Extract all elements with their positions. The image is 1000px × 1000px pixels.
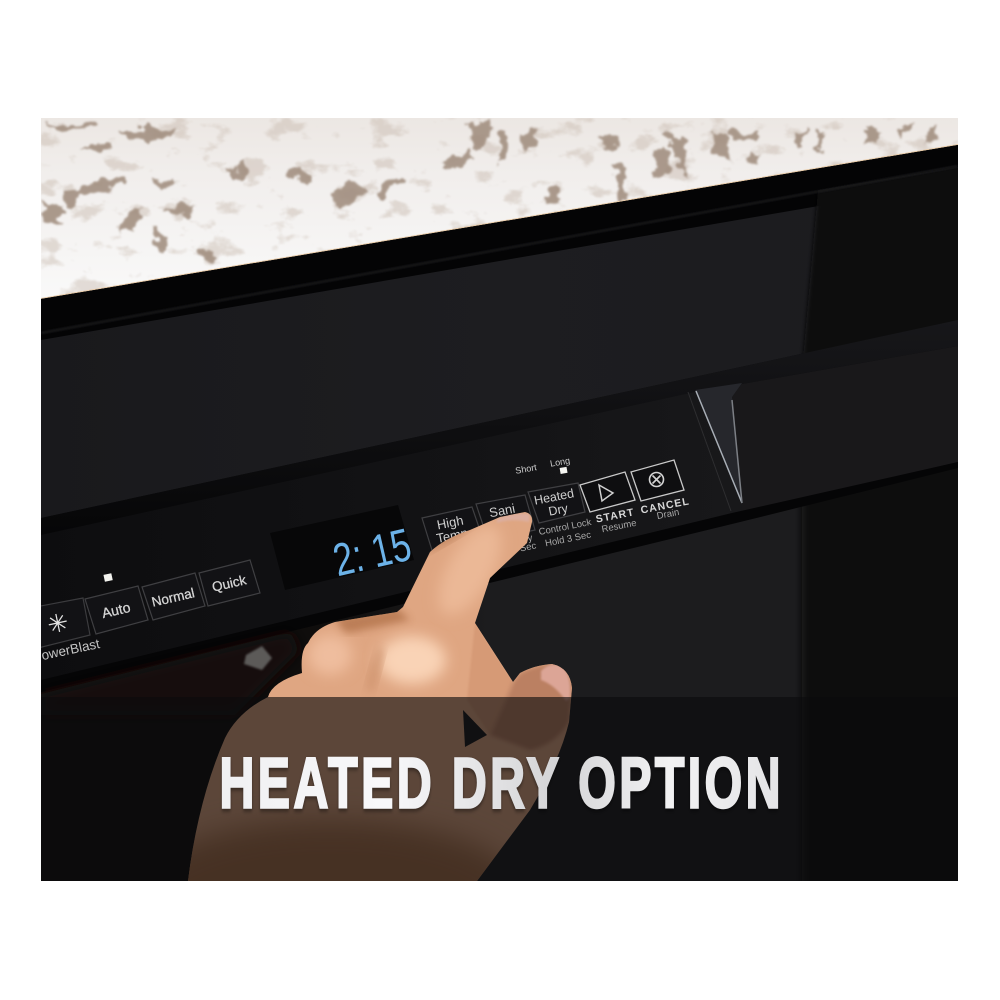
panel: dark reflection on lower door [800, 468, 958, 697]
indicator light: Auto [103, 573, 113, 582]
infographic: dishwasher photo with caption [41, 118, 958, 881]
hand: middle finger shade [467, 623, 513, 735]
panel: granite countertop [41, 118, 958, 308]
button: High Temp [421, 506, 479, 550]
hand: finger highlight [438, 520, 502, 614]
label: Control Lock: Control Lock [538, 517, 593, 538]
panel: photo base [41, 145, 958, 535]
caption shadow: HEATED DRY OPTION [219, 746, 781, 825]
label: Control Lock: Hold 3 Sec [544, 530, 592, 549]
hand: thumbnail [541, 665, 570, 701]
button: Heated Dry [528, 483, 585, 523]
button: Cancel: CANCEL [640, 495, 691, 517]
button: Cancel: Drain [656, 507, 680, 522]
display: cycle time: 2: 15 [328, 518, 416, 586]
hand: base skin [180, 505, 580, 885]
button: Sani [475, 494, 536, 532]
panel: control strip lower lip [41, 462, 958, 692]
panel: reflection below strip [48, 635, 292, 697]
label: Sani secondary text: y [527, 533, 534, 544]
button: High Temp: Temp [435, 525, 469, 546]
indicator light: Long dry [560, 467, 568, 474]
icon: chrome handle wedge [688, 383, 742, 511]
hand: tendon shadow between knuckles [363, 645, 387, 695]
hand: finger knuckle shade [430, 530, 470, 553]
button: High Temp: High [436, 513, 465, 532]
button: Sani: Sani [488, 501, 516, 520]
labels: Short and Long: Short [515, 462, 538, 476]
caption title: HEATED DRY OPTION [219, 743, 781, 823]
label: Control Lock [539, 518, 592, 546]
button: Auto [85, 586, 148, 634]
hand: first knuckle highlight [308, 635, 352, 675]
button: Cancel [631, 460, 691, 522]
panel: right side handle face [732, 346, 958, 513]
button: Heated Dry: Heated [533, 486, 575, 508]
icon: pale reflection on door [244, 646, 272, 670]
display: cycle time [270, 505, 416, 590]
button: Normal [142, 573, 205, 620]
hand: thumb [490, 664, 572, 750]
button: Quick: Quick [211, 572, 248, 595]
label: Sani secondary text [520, 536, 536, 552]
control panel labels and buttons [30, 455, 691, 665]
hand: knuckle highlight [378, 636, 446, 684]
hand: fingernail on index [497, 514, 530, 523]
label: Sani secondary text: Sec [519, 540, 537, 554]
hand: crease above knuckles [335, 608, 410, 634]
panel: control strip [112, 384, 742, 662]
button: Normal: Normal [150, 585, 196, 610]
button: Start: START [595, 506, 636, 526]
panel: black recess under countertop [41, 145, 958, 299]
button: Start [580, 472, 638, 535]
hand: dark gap between fingers [463, 710, 487, 747]
button: Quick [199, 560, 260, 606]
button: Auto: Auto [100, 599, 132, 621]
labels: Short and Long [516, 458, 570, 474]
panel: upper dishwasher door panel [41, 206, 818, 518]
button: PowerBlast: ✳ [45, 608, 71, 640]
button: PowerBlast [41, 597, 100, 660]
panel: recess cover above door panel [41, 145, 958, 299]
labels: Short and Long: Long [549, 455, 571, 469]
button: Start: Resume [601, 518, 638, 535]
panel: dark reflection on upper door [802, 168, 958, 354]
caption band [41, 697, 958, 881]
hand: lower wrist shade [140, 820, 520, 960]
hand pressing the Sani button [188, 512, 572, 881]
panel: door handle rail [444, 320, 958, 432]
stone edge highlight [41, 144, 958, 298]
panel: ridge highlight along top of door [41, 166, 958, 333]
button: PowerBlast: PowerBlast [31, 636, 101, 665]
panel: lower door [318, 506, 803, 838]
button: Heated Dry: Dry [547, 501, 570, 519]
